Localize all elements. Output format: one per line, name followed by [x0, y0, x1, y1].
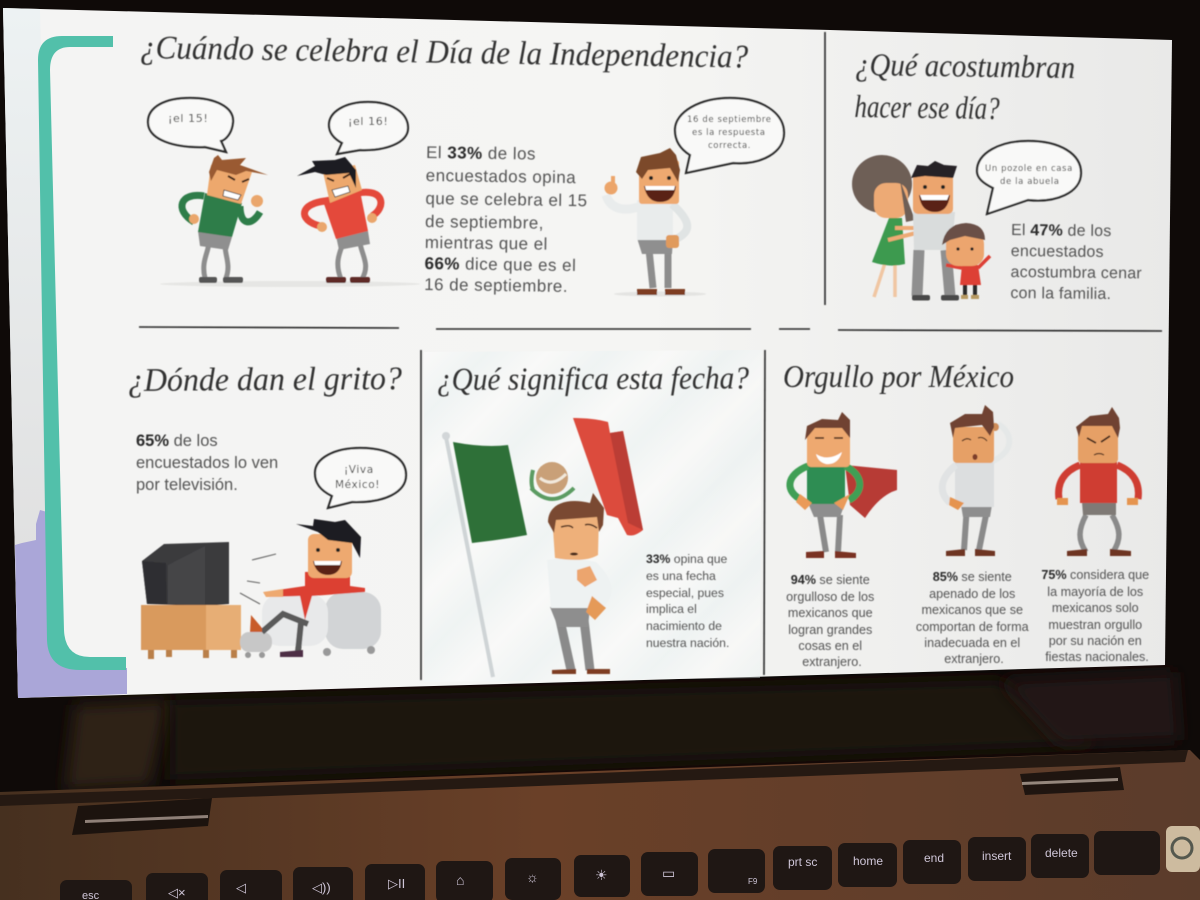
text: 85%: 85% se siente — [933, 570, 1012, 584]
character: man hand on heart — [547, 493, 612, 674]
text: 33% especial: nacimiento de — [646, 619, 722, 633]
speech bubble: pozole — [977, 141, 1081, 214]
heading: cuándo: ¿Cuándo se celebra el Día de la Independencia? — [140, 30, 749, 76]
ground shadow — [160, 281, 420, 287]
text: 33% and 66%: El 33% de los — [426, 143, 536, 164]
text: 33% and 66%: de septiembre, — [425, 212, 544, 233]
text: 65%: por televisión. — [136, 476, 238, 494]
icon: mexican flag — [442, 418, 643, 677]
character: man in armchair — [240, 519, 381, 658]
character: family — [852, 155, 990, 300]
text: 85%: comportan de forma — [916, 620, 1029, 634]
text: 75%: 75% considera que — [1041, 568, 1149, 582]
text: 33% and 66%: 66% dice que es el — [424, 254, 576, 275]
keyboard keys: F9 — [748, 877, 758, 886]
speech bubble: respuesta correcta: 16 de septiembre — [687, 115, 772, 125]
heading: dónde: ¿Dónde dan el grito? — [128, 361, 403, 399]
section dividers — [139, 32, 1162, 680]
screen — [3, 8, 1172, 698]
character: embarrassed man — [942, 405, 1009, 556]
character: green sweater arguing — [182, 155, 268, 283]
panel: orgullo por méxico — [783, 358, 1153, 669]
text: 94%: orgulloso de los — [786, 590, 874, 604]
text: 75%: mexicanos solo — [1052, 601, 1139, 615]
text: 33% especial: 33% opina que — [646, 552, 727, 566]
speech bubble: respuesta correcta: es la respuesta — [692, 128, 766, 138]
text: 94%: logran grandes — [788, 623, 872, 637]
speech bubble: respuesta correcta — [675, 98, 784, 173]
text: 47%: con la familia. — [1010, 285, 1111, 303]
speech bubble: el 15 — [148, 98, 233, 152]
speech bubble: pozole: de la abuela — [1000, 177, 1060, 187]
speech bubble: pozole: Un pozole en casa — [985, 164, 1073, 174]
text: 47%: encuestados — [1011, 243, 1104, 261]
keyboard keys: ☼ — [526, 869, 539, 885]
text: 85%: apenado de los — [929, 587, 1015, 601]
icon: television on desk — [141, 542, 241, 659]
text: 85%: inadecuada en el — [924, 636, 1020, 650]
text: 33% and 66%: mientras que el — [425, 233, 548, 254]
keyboard keys: delete — [1045, 846, 1078, 860]
text: 33% especial: implica el — [646, 602, 697, 616]
keyboard keys: ▭ — [662, 865, 675, 881]
text: 85%: mexicanos que se — [921, 603, 1023, 617]
heading: qué acostumbran: ¿Qué acostumbran — [855, 46, 1075, 85]
speech bubble: viva méxico: México! — [335, 479, 380, 491]
text: 75%: muestran orgullo — [1048, 618, 1142, 632]
speech bubble: viva méxico — [315, 448, 406, 508]
speech bubble: el 16: ¡el 16! — [348, 115, 388, 128]
character: man pointing — [604, 148, 706, 296]
speech bubble: viva méxico: ¡Viva — [344, 464, 374, 476]
text: 85%: extranjero. — [944, 652, 1004, 666]
text: 65%: encuestados lo ven — [136, 454, 278, 472]
text: 75%: por su nación en — [1049, 634, 1142, 648]
speech bubble: el 16 — [329, 102, 408, 154]
panel: dónde dan el grito — [128, 361, 406, 659]
keyboard keys — [60, 826, 1200, 900]
text: 94%: mexicanos que — [788, 606, 873, 620]
keyboard deck — [0, 750, 1200, 900]
text: 75%: fiestas nacionales. — [1045, 650, 1149, 664]
text: 33% especial: nuestra nación. — [646, 636, 729, 650]
keyboard keys: insert — [982, 849, 1012, 863]
text: 75%: la mayoría de los — [1047, 585, 1143, 599]
text: 33% especial: es una fecha — [646, 569, 716, 583]
text: 94%: extranjero. — [802, 655, 862, 669]
text: 33% and 66%: encuestados opina — [426, 166, 576, 187]
hinge right — [1020, 767, 1124, 795]
text: 65%: 65% de los — [136, 432, 218, 450]
keyboard keys: ◁ — [236, 880, 246, 895]
panel: qué significa esta fecha — [437, 359, 749, 677]
keyboard keys: ☀ — [595, 867, 608, 883]
text: 94%: 94% se siente — [791, 573, 870, 587]
keyboard keys: ◁× — [168, 885, 186, 900]
panel: qué acostumbran — [852, 46, 1147, 303]
keyboard keys: ⌂ — [456, 872, 464, 888]
keyboard keys: ◁)) — [312, 880, 331, 895]
heading: qué significa: ¿Qué significa esta fecha? — [437, 359, 749, 397]
keyboard keys: prt sc — [788, 855, 817, 869]
speech bubble: el 15: ¡el 15! — [168, 112, 208, 125]
heading: qué acostumbran: hacer ese día? — [854, 88, 1000, 126]
character: annoyed man — [1057, 407, 1138, 556]
teal bracket — [38, 36, 126, 670]
panel: cuándo se celebra — [140, 30, 784, 297]
text: 33% and 66%: que se celebra el 15 — [425, 189, 588, 210]
text: 33% especial: especial, pues — [646, 586, 724, 600]
heading: orgullo: Orgullo por México — [783, 358, 1014, 394]
text: 47%: El 47% de los — [1011, 222, 1112, 240]
hinge left — [72, 798, 212, 835]
speech bubble: respuesta correcta: correcta. — [708, 141, 751, 151]
keyboard keys: end — [924, 851, 944, 865]
character: hero with cape — [790, 412, 897, 558]
keyboard keys: home — [853, 854, 883, 868]
keyboard keys: ▷II — [388, 876, 405, 891]
text: 33% and 66%: 16 de septiembre. — [424, 275, 568, 296]
text: 94%: cosas en el — [798, 639, 862, 653]
character: red sweater arguing — [297, 157, 381, 283]
text: 47%: acostumbra cenar — [1011, 264, 1142, 282]
